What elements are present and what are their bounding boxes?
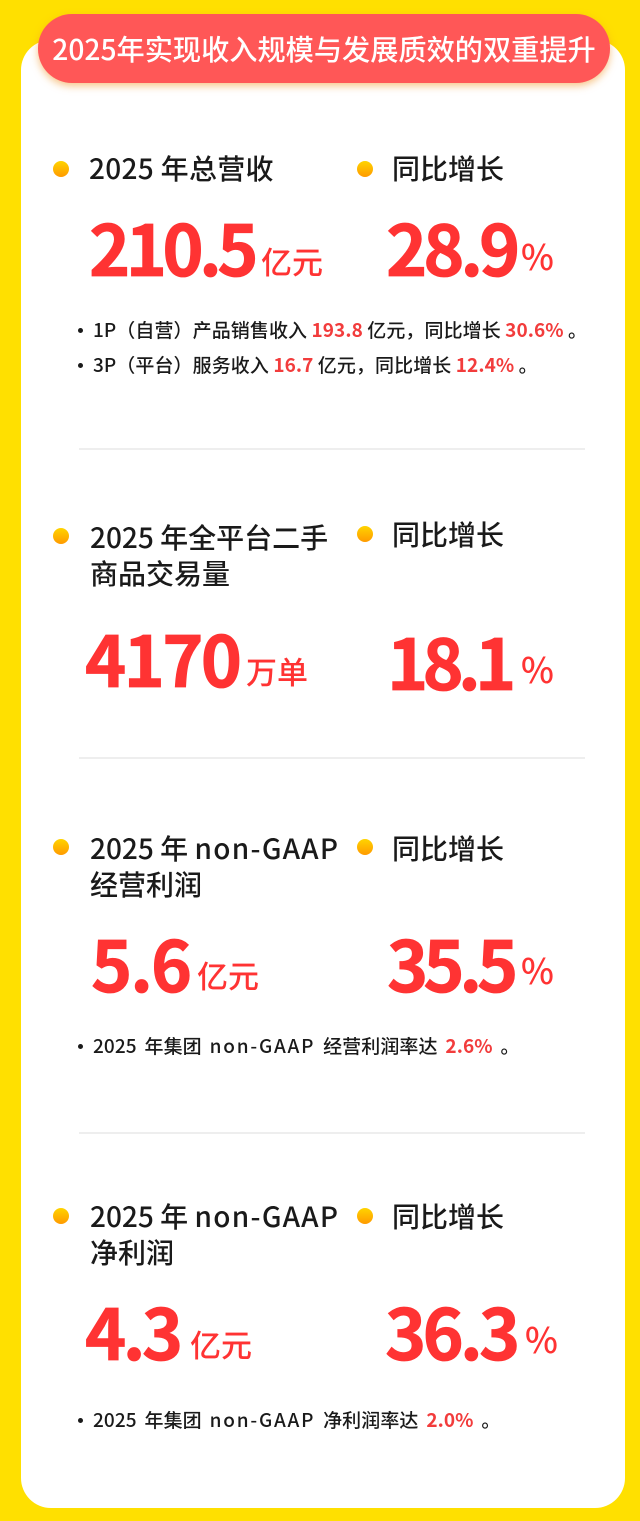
note: 1P revenue: 1P（自营）产品销售收入 193.8 亿元，同比增长 30.6% 。: [93, 316, 587, 343]
metric: revenue growth: 28.9: [386, 196, 516, 297]
icon: bullet dot: [357, 839, 373, 855]
metric: operating profit growth: 35.5: [387, 912, 513, 1013]
unit: revenue: 亿元: [261, 238, 323, 283]
metric: net profit growth: 36.3: [385, 1280, 516, 1381]
icon: bullet dot: [357, 1208, 373, 1224]
heading: transaction volume: 商品交易量: [90, 553, 230, 593]
unit: net profit: 亿元: [190, 1321, 252, 1366]
heading: year-on-year growth: 同比增长: [392, 148, 504, 188]
section: non-GAAP operating profit: [53, 828, 554, 1059]
section: non-GAAP net profit: [53, 1196, 558, 1433]
section: total revenue: [53, 148, 587, 378]
unit: operating profit: 亿元: [197, 952, 259, 997]
metric: operating profit value: 5.6: [91, 912, 190, 1013]
note: operating margin: 2025 年集团 non-GAAP 经营利润率达 2.6% 。: [93, 1032, 520, 1059]
note: 3P revenue: 3P（平台）服务收入 16.7 亿元，同比增长 12.4% 。: [93, 351, 538, 378]
heading: net profit: 净利润: [90, 1232, 174, 1272]
section: second-hand transaction volume: [53, 514, 554, 711]
heading: operating profit: [90, 828, 339, 904]
metric: net profit value: 4.3: [85, 1280, 180, 1381]
icon: bullet dot: [53, 1208, 69, 1224]
heading: year-on-year growth: 同比增长: [392, 1196, 504, 1236]
heading: total revenue: 2025 年总营收: [89, 148, 274, 188]
heading: transaction volume: [90, 517, 328, 593]
metric: transaction volume value: 4170: [85, 607, 239, 708]
icon: bullet dot: [53, 161, 69, 177]
heading: transaction volume: 2025 年全平台二手: [90, 517, 328, 557]
unit: percent: %: [521, 230, 554, 281]
unit: percent: %: [521, 643, 554, 694]
metric: revenue value: 210.5: [89, 196, 254, 297]
title banner: [38, 14, 610, 83]
heading: operating profit: 经营利润: [90, 864, 202, 904]
heading: net profit: [90, 1196, 339, 1272]
heading: year-on-year growth: 同比增长: [392, 828, 504, 868]
unit: transaction volume: 万单: [246, 648, 308, 693]
icon: bullet dot: [53, 839, 69, 855]
unit: percent: %: [525, 1313, 558, 1364]
note: net margin: 2025 年集团 non-GAAP 净利润率达 2.0% 。: [93, 1406, 500, 1433]
unit: percent: %: [521, 944, 554, 995]
icon: bullet dot: [357, 526, 373, 542]
heading: year-on-year growth: 同比增长: [392, 514, 504, 554]
icon: bullet dot: [357, 161, 373, 177]
heading: net profit: 2025 年 non-GAAP: [90, 1196, 339, 1236]
heading: operating profit: 2025 年 non-GAAP: [90, 828, 339, 868]
title banner: 2025年实现收入规模与发展质效的双重提升: [52, 28, 596, 69]
icon: bullet dot: [53, 528, 69, 544]
metric: volume growth: 18.1: [387, 610, 510, 711]
